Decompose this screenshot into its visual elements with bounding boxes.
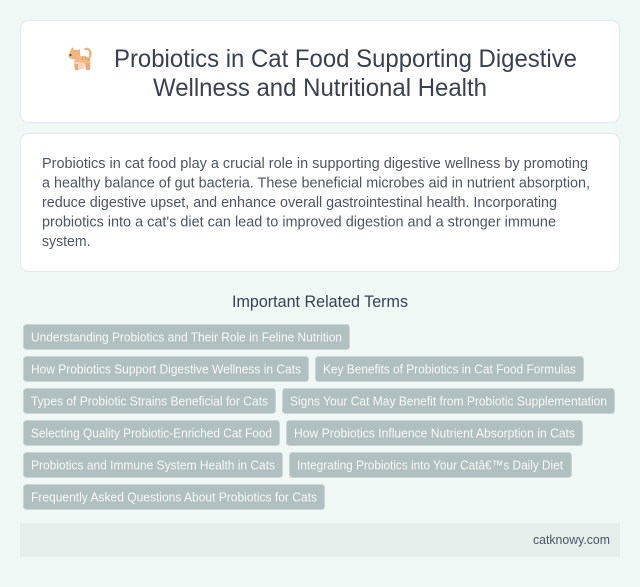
tag: key benefits xyxy=(316,356,584,382)
footer credit: catknowy.com xyxy=(533,533,610,547)
tag: digestive wellness: How Probiotics Support Digestive Wellness in Cats xyxy=(31,362,301,376)
tag: digestive wellness xyxy=(24,356,308,382)
text block: description paragraph: reduce digestive upset, and enhance overall gastrointestinal health. Incorporating xyxy=(42,194,557,211)
tag: understanding probiotics xyxy=(24,324,350,350)
heading: title: Wellness and Nutritional Health xyxy=(153,74,487,102)
panel: description xyxy=(20,134,620,272)
tag: immune system: Probiotics and Immune System Health in Cats xyxy=(31,458,275,472)
text block: description paragraph: a healthy balance of gut bacteria. These beneficial microbes aid in nutrient absorption, xyxy=(42,174,590,192)
icon: orange cat xyxy=(68,47,92,70)
text block: description paragraph xyxy=(42,155,590,250)
tag: probiotic strains: Types of Probiotic Strains Beneficial for Cats xyxy=(31,394,268,408)
text block: description paragraph: probiotics into a cat's diet can lead to improved digestion and a stronger immune xyxy=(42,214,556,230)
tag: signs: Signs Your Cat May Benefit from Probiotic Supplementation xyxy=(290,394,607,408)
tag: nutrient absorption: How Probiotics Influence Nutrient Absorption in Cats xyxy=(294,426,575,440)
tag: daily diet xyxy=(290,452,572,478)
heading: title: Probiotics in Cat Food Supporting Digestive xyxy=(114,45,577,73)
heading: important related terms: Important Related Terms xyxy=(232,293,408,311)
tag: key benefits: Key Benefits of Probiotics in Cat Food Formulas xyxy=(323,362,576,376)
tag: understanding probiotics: Understanding Probiotics and Their Role in Feline Nutrition xyxy=(31,330,342,344)
text block: description paragraph: system. xyxy=(42,233,90,250)
panel: title card xyxy=(20,20,620,122)
heading: title xyxy=(114,45,577,102)
tag: faq: Frequently Asked Questions About Probiotics for Cats xyxy=(31,490,317,504)
tag: selecting food xyxy=(24,420,280,446)
tag: nutrient absorption xyxy=(286,420,582,446)
tag list: related terms xyxy=(24,324,614,510)
text block: description paragraph: Probiotics in cat food play a crucial role in supporting digestive wellness by promoting xyxy=(42,155,588,172)
tag: faq xyxy=(24,484,324,510)
tag: probiotic strains xyxy=(24,388,276,414)
footer xyxy=(20,523,620,557)
tag: signs xyxy=(282,388,614,414)
tag: daily diet: Integrating Probiotics into Your Catâ€™s Daily Diet xyxy=(297,458,563,472)
tag: immune system xyxy=(24,452,282,478)
tag: selecting food: Selecting Quality Probiotic-Enriched Cat Food xyxy=(31,426,272,440)
